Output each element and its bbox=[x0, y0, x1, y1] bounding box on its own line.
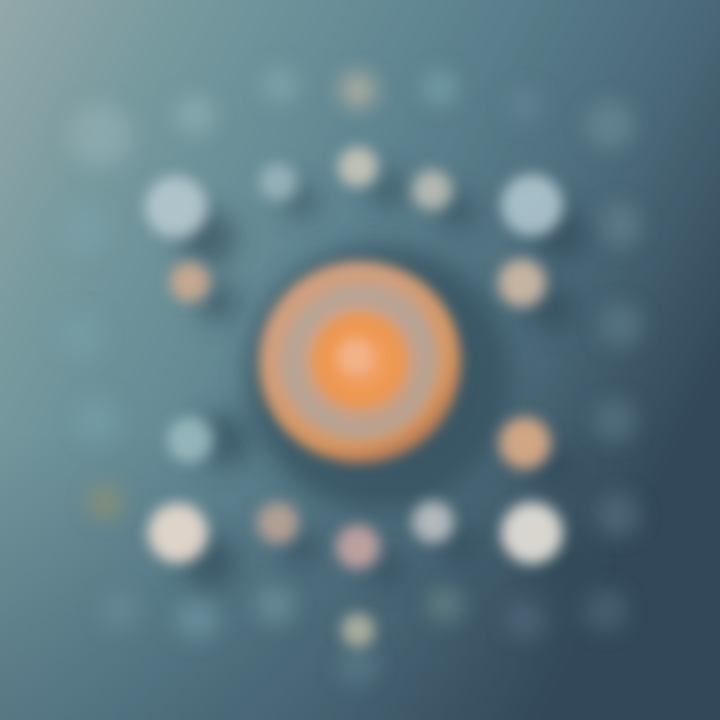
medium circles bbox=[167, 259, 551, 469]
sphere body bbox=[259, 261, 461, 463]
inner ring circles bbox=[257, 147, 454, 647]
orange core bbox=[312, 313, 408, 409]
shadows beneath circles bbox=[180, 172, 590, 590]
faint outer ring of circles bbox=[56, 67, 642, 685]
dark ring around central sphere bbox=[246, 246, 510, 510]
large corner circles bbox=[145, 174, 563, 564]
grey ring bbox=[293, 295, 427, 429]
core highlight bbox=[338, 339, 372, 373]
central sphere bbox=[259, 261, 461, 463]
